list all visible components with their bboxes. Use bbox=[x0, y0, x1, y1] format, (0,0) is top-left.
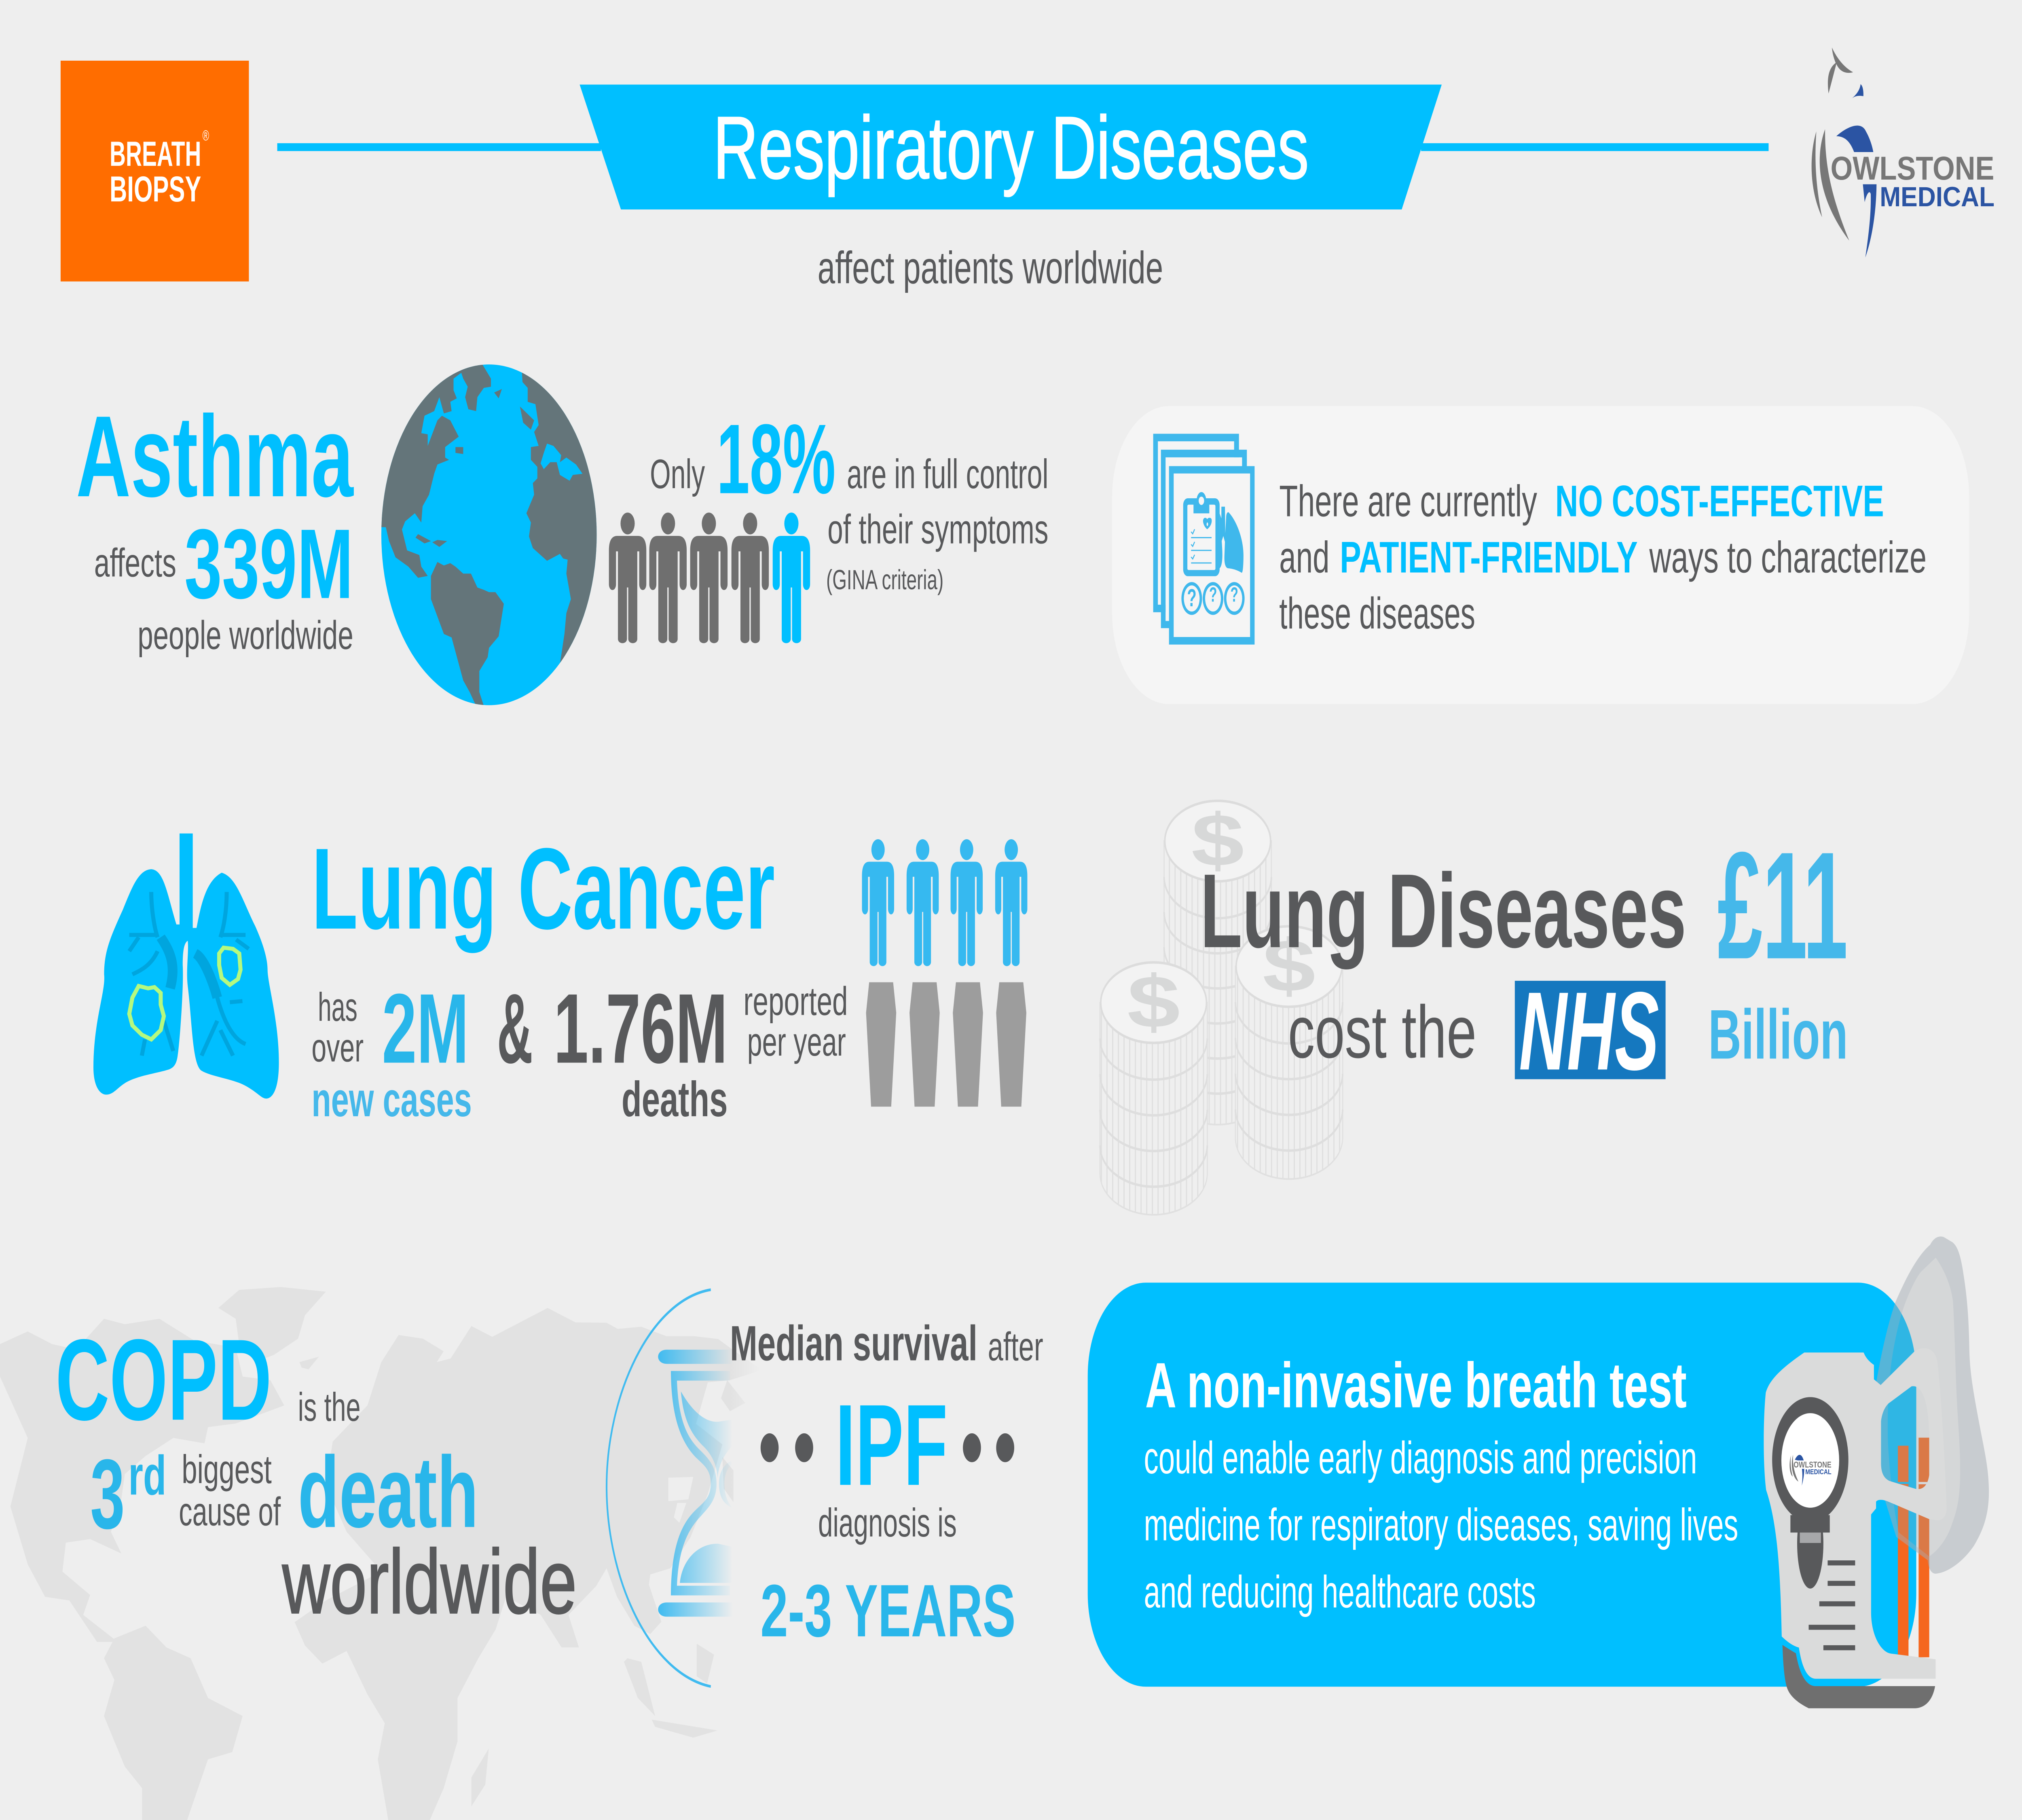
logo: Owlstone Medical: MEDICAL bbox=[1880, 182, 1995, 213]
icon: coin stacks: $ bbox=[1191, 799, 1244, 882]
icon: coin stacks: $ bbox=[1127, 961, 1180, 1043]
text: breath test description: and reducing healthcare costs bbox=[1144, 1566, 1536, 1617]
text: no cost-effective and patient-friendly: ways to characterize bbox=[1649, 533, 1927, 582]
heading: COPD: COPD bbox=[55, 1315, 272, 1444]
icon: lungs bbox=[93, 834, 279, 1098]
text: is the 3rd biggest cause of death worldwide bbox=[90, 1384, 577, 1632]
icon: hourglass bbox=[658, 1350, 733, 1617]
text: diagnosis is: diagnosis is bbox=[818, 1500, 957, 1545]
text: only 18% in full control: Only bbox=[650, 451, 705, 497]
text: no cost-effective and patient-friendly: and bbox=[1279, 533, 1330, 582]
text: breath test description: medicine for respiratory diseases, saving lives bbox=[1144, 1499, 1738, 1550]
icon: breath sampling device bbox=[1764, 1236, 1989, 1708]
panel: breath test bbox=[1088, 1236, 1989, 1708]
panel: lung cancer bbox=[93, 824, 1027, 1127]
logo: Breath Biopsy: BIOPSY bbox=[110, 169, 201, 209]
text: has over 2M new cases: over bbox=[311, 1025, 364, 1070]
heading: non-invasive breath test: A non-invasive breath test bbox=[1145, 1350, 1687, 1421]
text: median survival after: after bbox=[988, 1324, 1043, 1369]
figure: £11 Billion: Billion bbox=[1708, 995, 1848, 1074]
text: only 18% in full control: 18% bbox=[717, 404, 835, 514]
text: median survival after: Median survival bbox=[730, 1316, 977, 1371]
text: has over 2M new cases: 2M bbox=[382, 973, 469, 1084]
text: affects 339M people worldwide: people worldwide bbox=[137, 613, 353, 658]
text: affects 339M people worldwide bbox=[94, 509, 353, 658]
panel: lung diseases cost bbox=[1100, 799, 1848, 1215]
title banner bbox=[277, 85, 1768, 210]
text: only 18% in full control: of their symptoms bbox=[827, 506, 1048, 552]
panel: asthma bbox=[76, 364, 1048, 706]
text: no cost-effective and patient-friendly bbox=[1279, 476, 1927, 638]
text: affects 339M people worldwide: affects bbox=[94, 540, 176, 585]
text: has over 2M new cases bbox=[311, 973, 472, 1127]
panel: IPF bbox=[607, 1290, 1043, 1687]
logo: Breath Biopsy bbox=[61, 61, 249, 281]
logo: NHS: NHS bbox=[1519, 969, 1659, 1093]
text: no cost-effective and patient-friendly: PATIENT-FRIENDLY bbox=[1340, 533, 1638, 582]
icon: coin stacks bbox=[1100, 799, 1343, 1215]
panel: COPD bbox=[55, 1315, 577, 1632]
panel: no cost-effective callout bbox=[1112, 406, 1969, 704]
figure: £11 Billion: £11 bbox=[1717, 820, 1848, 991]
heading: Asthma: Asthma bbox=[76, 392, 354, 521]
text: no cost-effective and patient-friendly: these diseases bbox=[1279, 589, 1475, 638]
heading: Lung Cancer: Lung Cancer bbox=[311, 824, 775, 953]
text: cost the: cost the bbox=[1288, 990, 1476, 1073]
text: & 1.76M deaths reported per year: reported bbox=[743, 979, 848, 1024]
text: & 1.76M deaths reported per year: & bbox=[497, 973, 533, 1084]
text: is the 3rd biggest cause of death worldwide: worldwide bbox=[282, 1531, 577, 1632]
icon: breath sampling device: OWLSTONE bbox=[1794, 1460, 1832, 1469]
text: has over 2M new cases: has bbox=[318, 984, 357, 1030]
icon: medical documents bbox=[1153, 434, 1254, 645]
text: & 1.76M deaths reported per year: per year bbox=[747, 1019, 846, 1064]
logo: Breath Biopsy: BREATH bbox=[110, 135, 201, 174]
text: breath test description bbox=[1144, 1432, 1738, 1617]
figure: £11 Billion bbox=[1708, 820, 1848, 1074]
icon: breath sampling device: MEDICAL bbox=[1805, 1469, 1832, 1476]
icon: coin stacks: $ bbox=[1263, 925, 1316, 1007]
background: world map bbox=[0, 1287, 762, 1820]
text: only 18% in full control: (GINA criteria) bbox=[826, 565, 943, 596]
logo: Owlstone Medical bbox=[1812, 47, 1995, 258]
icon: people row bbox=[609, 512, 810, 643]
logo: Breath Biopsy: ® bbox=[203, 128, 209, 144]
logo: Owlstone Medical: OWLSTONE bbox=[1830, 150, 1994, 187]
text: no cost-effective and patient-friendly: There are currently bbox=[1279, 476, 1537, 526]
text: only 18% in full control: are in full control bbox=[847, 451, 1048, 497]
text: & 1.76M deaths reported per year: 1.76M bbox=[554, 973, 728, 1084]
text: is the 3rd biggest cause of death worldwide: death bbox=[298, 1436, 478, 1549]
text: only 18% in full control bbox=[650, 404, 1048, 596]
title banner: Respiratory Diseases bbox=[713, 98, 1309, 197]
icon: coffins bbox=[866, 982, 1026, 1107]
text: IPF with dots bbox=[761, 1381, 1014, 1510]
icon: medical documents: ? bbox=[1231, 583, 1238, 607]
heading: Lung Diseases: Lung Diseases bbox=[1200, 852, 1686, 969]
text: is the 3rd biggest cause of death worldwide: 3 bbox=[90, 1439, 125, 1549]
subtitle: affect patients worldwide bbox=[818, 242, 1163, 293]
text: IPF with dots: IPF bbox=[835, 1381, 948, 1510]
text: no cost-effective and patient-friendly: NO COST-EFFECTIVE bbox=[1555, 476, 1884, 526]
decorative arc bbox=[607, 1290, 711, 1687]
text: affects 339M people worldwide: 339M bbox=[184, 509, 353, 619]
text: is the 3rd biggest cause of death worldwide: is the bbox=[298, 1384, 361, 1429]
icon: blue people bbox=[862, 839, 1027, 966]
text: & 1.76M deaths reported per year bbox=[497, 973, 848, 1127]
text: is the 3rd biggest cause of death worldwide: cause of bbox=[179, 1489, 281, 1534]
icon: globe bbox=[381, 364, 597, 705]
text: 2-3 years: 2-3 YEARS bbox=[760, 1569, 1015, 1652]
text: is the 3rd biggest cause of death worldwide: biggest bbox=[182, 1447, 272, 1492]
icon: medical documents: ? bbox=[1209, 583, 1217, 607]
text: & 1.76M deaths reported per year: deaths bbox=[622, 1072, 728, 1127]
text: has over 2M new cases: new cases bbox=[311, 1073, 472, 1127]
icon: medical documents: ? bbox=[1187, 584, 1197, 612]
map fade bbox=[730, 1253, 764, 1820]
text: is the 3rd biggest cause of death worldwide: rd bbox=[128, 1445, 166, 1507]
text: breath test description: could enable early diagnosis and precision bbox=[1144, 1432, 1697, 1483]
